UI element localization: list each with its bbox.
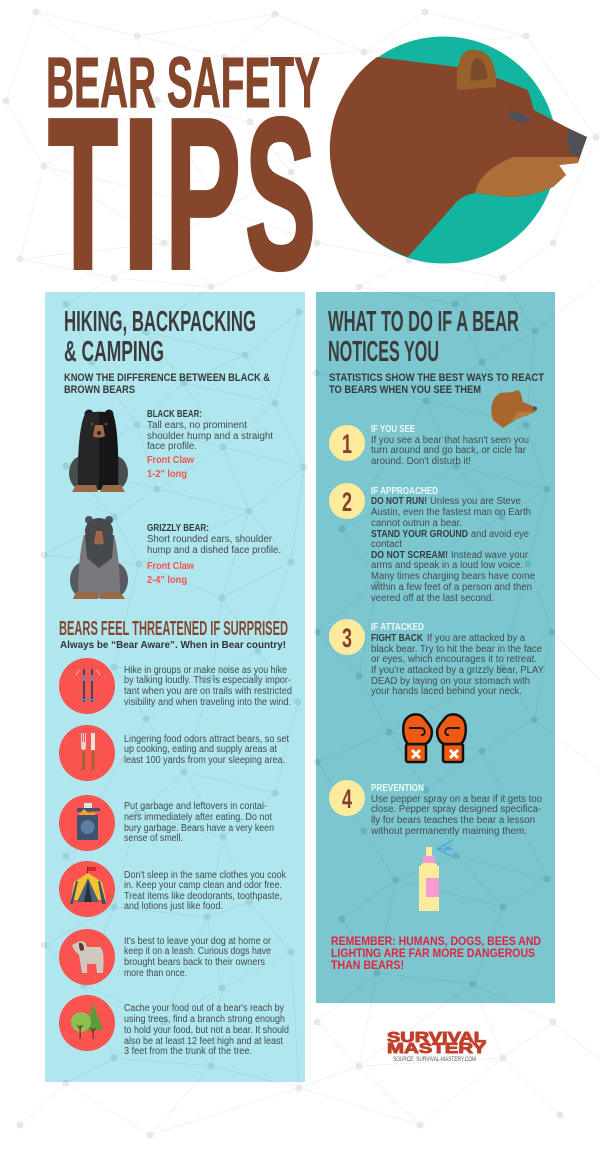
text: hike in groups: Hike in groups or make noise as you hike [124, 665, 287, 676]
text: hike in groups: visibility and when traveling into the wind. [124, 697, 291, 708]
text: if approached: Many times charging bears have come [371, 571, 535, 582]
text: grizzly bear description: hump and a dished face profile. [147, 545, 281, 556]
text: if approached: and avoid eye [471, 529, 529, 540]
text: if approached: within a few feet of a person and then [370, 582, 532, 593]
heading: bears feel threatened: BEARS FEEL THREATENED IF SURPRISED [59, 618, 288, 640]
text: if you see: IF YOU SEE [371, 424, 415, 435]
text: if approached: STAND YOUR GROUND [371, 529, 468, 540]
text: put garbage [124, 801, 274, 844]
heading: what to do: NOTICES YOU [328, 336, 439, 368]
panel: what to do if a bear notices you [316, 292, 555, 1003]
text: prevention [370, 783, 542, 837]
title: P [165, 73, 241, 314]
text: hike in groups: by talking loudly. This is especially impor- [124, 675, 291, 686]
text: put garbage: sense of smell. [124, 833, 183, 844]
icon: trees [59, 995, 115, 1051]
text: leave your dog at home: It's best to leave your dog at home or [124, 936, 272, 947]
text: grizzly bear description: GRIZZLY BEAR: [147, 523, 209, 534]
logo: survival mastery: SOURCE: SURVIVAL-MASTERY.COM [393, 1057, 476, 1063]
number badge 4 [329, 780, 365, 816]
text: prevention: PREVENTION [371, 783, 424, 794]
number badge 4: 4 [342, 784, 352, 814]
text: grizzly bear description [147, 523, 281, 586]
callout: remember: THAN BEARS! [331, 958, 404, 972]
text: don't sleep: Don't sleep in the same clothes you cook [124, 870, 287, 881]
text: if approached: Unless you are Steve [430, 496, 521, 507]
text: leave your dog at home [124, 936, 272, 979]
text: if approached: Instead wave your [451, 550, 529, 561]
text: if attacked: DEAD by laying on your stomach with [371, 676, 530, 687]
text: if attacked: FIGHT BACK [371, 633, 424, 644]
title: T [48, 73, 118, 314]
text: if approached: IF APPROACHED [371, 486, 438, 497]
subheading: know the difference: KNOW THE DIFFERENCE BETWEEN BLACK & [64, 372, 270, 384]
text: if attacked: black bear. Try to hit the bear in the face [371, 644, 542, 655]
text: lingering food odors: least 100 yards from your sleeping area. [124, 755, 285, 766]
logo: survival mastery: MASTERY [387, 1041, 486, 1057]
heading: hiking: & CAMPING [64, 336, 164, 368]
number badge 2: 2 [342, 487, 352, 517]
number badge 1: 1 [342, 429, 352, 459]
subheading: statistics [329, 372, 544, 396]
text: cache your food: also be at least 12 feet high and at least [124, 1036, 283, 1047]
text: black bear description [147, 409, 273, 480]
text: put garbage: Put garbage and leftovers in contai- [124, 801, 267, 812]
icon: fork and knife [59, 725, 115, 781]
text: prevention: lly for bears teaches the bear a lesson [371, 815, 535, 826]
text: lingering food odors: up cooking, eating and supply areas at [124, 744, 277, 755]
text: lingering food odors [124, 734, 289, 766]
icon: small bear head [491, 390, 537, 428]
text: if approached: arms and speak in a loud low voice. [371, 560, 523, 571]
text: cache your food: to hold your food, but not a bear. It should [124, 1025, 289, 1036]
text: don't sleep [124, 870, 287, 912]
number badge 2 [329, 483, 365, 519]
text: put garbage: bury garbage. Bears have a very keen [124, 823, 274, 834]
callout: remember [331, 934, 541, 972]
text: prevention: close. Pepper spray designed specifica- [371, 804, 541, 815]
text: if you see: If you see a bear that hasn't seen you [371, 435, 529, 446]
text: don't sleep: and lotions just like food. [124, 901, 223, 912]
text: cache your food: 3 feet from the trunk of the tree. [124, 1046, 252, 1057]
text: black bear description: shoulder hump and a straight [147, 431, 273, 442]
icon: bear head in teal circle [330, 36, 587, 264]
text: leave your dog at home: brought bears back to their owners [124, 957, 265, 968]
text: grizzly bear description: 2-4" long [147, 575, 187, 586]
text: don't sleep: Treat items like deodorants, toothpaste, [124, 891, 282, 902]
icon: trash bin [59, 795, 115, 851]
icon: black bear [69, 410, 128, 492]
text: put garbage: ners immediately after eating. Do not [124, 812, 272, 823]
text: if attacked: IF ATTACKED [371, 622, 424, 633]
text: grizzly bear description: Short rounded ears, shoulder [147, 534, 273, 545]
text: if approached: Austin, even the fastest man on Earth [371, 507, 531, 518]
text: if approached: veered off at the last second. [371, 593, 494, 604]
text: black bear description: face profile. [147, 441, 197, 452]
text: hike in groups [124, 665, 292, 708]
text: if attacked: your hands laced behind your neck. [371, 686, 522, 697]
subheading: statistics: STATISTICS SHOW THE BEST WAYS TO REACT [329, 372, 544, 384]
icon: trekking poles [59, 658, 115, 714]
text: prevention: Use pepper spray on a bear if it gets too [371, 794, 542, 805]
subheading: statistics: TO BEARS WHEN YOU SEE THEM [329, 384, 481, 396]
logo: survival mastery: SURVIVAL [387, 1030, 486, 1046]
panel: hiking, backpacking and camping [45, 292, 305, 1082]
title: I [122, 73, 160, 314]
heading: hiking [64, 306, 256, 368]
text: black bear description: 1-2" long [147, 469, 187, 480]
text: if approached: cannot outrun a bear. [371, 518, 462, 529]
text: if attacked: If you are attacked by a [427, 633, 525, 644]
subheading: always be bear aware: Always be “Bear Aware”. When in Bear country! [60, 639, 286, 651]
subheading: know the difference: BROWN BEARS [64, 384, 135, 396]
text: if attacked: or eyes, which encourages it to retreat. [371, 654, 537, 665]
text: if approached: DO NOT RUN! [371, 496, 427, 507]
icon: pepper spray [419, 840, 453, 911]
text: don't sleep: in. Keep your camp clean and odor free. [124, 880, 282, 891]
icon: dog [59, 929, 115, 985]
text: leave your dog at home: keep it on a leash. Curious dogs have [124, 946, 271, 957]
icon: boxing gloves [403, 714, 466, 762]
text: lingering food odors: Lingering food odors attract bears, so set [124, 734, 289, 745]
text: black bear description: Tall ears, no prominent [147, 420, 247, 431]
number badge 1 [329, 425, 365, 461]
heading: what to do [328, 306, 519, 368]
callout: remember: REMEMBER: HUMANS, DOGS, BEES AND [331, 934, 541, 948]
number badge 3 [329, 619, 365, 655]
text: cache your food: using trees, find a branch strong enough [124, 1014, 285, 1025]
title [46, 44, 320, 314]
heading: hiking: HIKING, BACKPACKING [64, 306, 256, 338]
text: black bear description: Front Claw [147, 455, 194, 466]
subheading: know the difference [64, 372, 270, 396]
text: cache your food [124, 1003, 289, 1057]
text: if approached: contact [371, 539, 402, 550]
text: if you see [371, 424, 529, 467]
text: if approached [370, 486, 535, 604]
text: if you see: around. Don't disturb it! [371, 456, 471, 467]
number badge 3: 3 [342, 623, 352, 653]
title: S [245, 73, 316, 314]
text: hike in groups: tant when you are on trails with restricted [124, 686, 292, 697]
logo: survival mastery [387, 1030, 486, 1063]
text: grizzly bear description: Front Claw [147, 561, 194, 572]
text: leave your dog at home: more than once. [124, 968, 187, 979]
icon: tent [59, 861, 115, 917]
text: if attacked [371, 622, 544, 697]
text: black bear description: BLACK BEAR: [147, 409, 202, 420]
callout: remember: LIGHTING ARE FAR MORE DANGEROUS [331, 946, 535, 960]
text: cache your food: Cache your food out of a bear's reach by [124, 1003, 284, 1014]
title: BEAR SAFETY [46, 44, 320, 123]
text: prevention: without permanently maiming them. [370, 826, 527, 837]
text: if approached: DO NOT SCREAM! [371, 550, 448, 561]
text: if you see: turn around and go back, or cicle far [371, 445, 527, 456]
text: if attacked: If you're attacked by a grizzly bear, PLAY [371, 665, 544, 676]
icon: grizzly bear [70, 516, 128, 599]
